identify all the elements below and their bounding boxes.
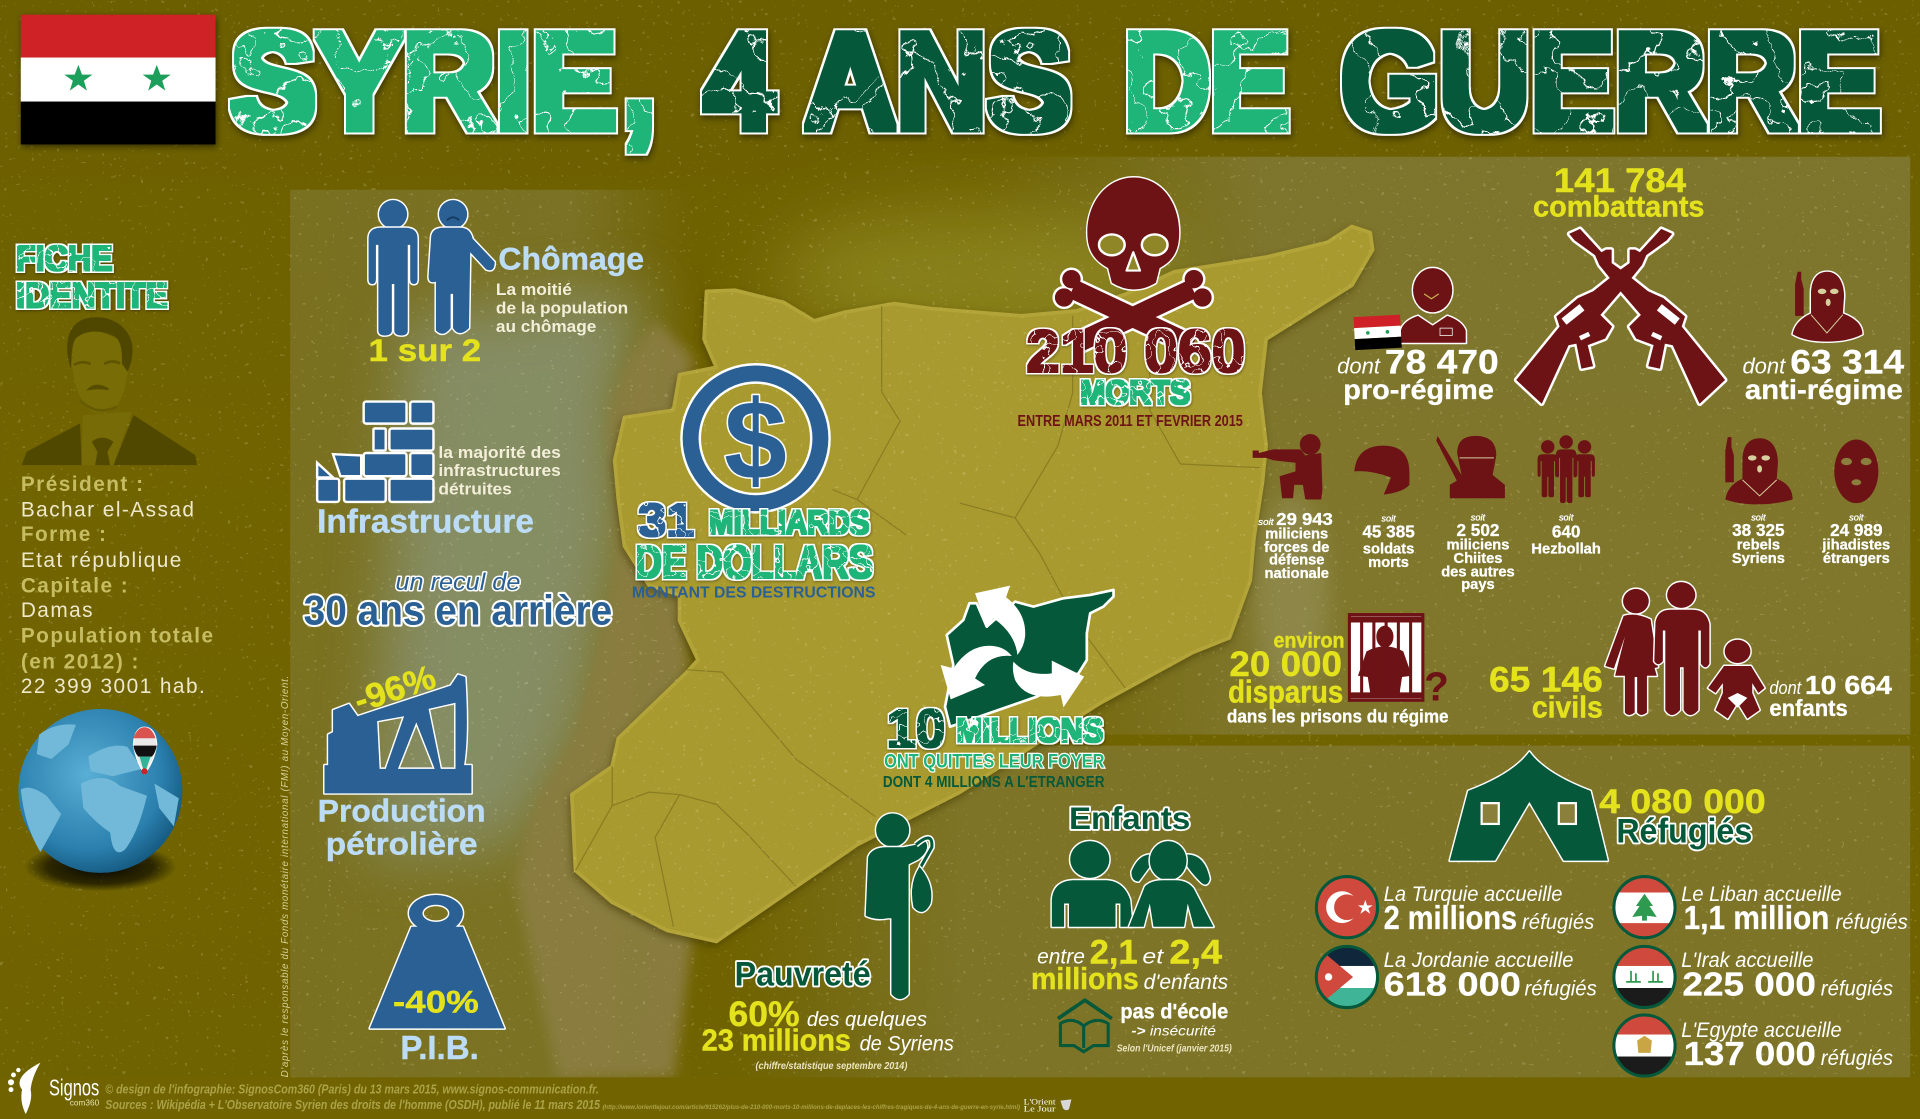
icon: crossed rifles: [1517, 229, 1725, 403]
neighbouring land west of the map: [514, 321, 692, 1077]
stat: 65 146: [1489, 660, 1603, 700]
footer credits: (http://www.lorientlejour.com/article/915262/plus-de-210-000-morts-10-millions-de-deplaces-les-chiffres-tragiques-de-4-ans-de-guerre-en-syrie.html): [602, 1104, 1020, 1111]
label: 24 989: [1830, 520, 1883, 540]
logo: Signos com360: com360: [70, 1098, 99, 1108]
block: 30 ans en arrière: un recul de: [396, 569, 520, 596]
caption: MONTANT DES DESTRUCTIONS: [632, 584, 876, 601]
footer credits: [105, 1081, 1020, 1112]
footer credits: Sources : Wikipédia + L'Observatoire Syrien des droits de l'homme (OSDH), publié le 11 mars 2015: [105, 1097, 601, 1112]
icon: boy and girl: [1052, 841, 1213, 927]
icon: tent: [1450, 752, 1608, 861]
block: 65 146 civils: enfants: [1769, 695, 1848, 721]
text block: identity facts: Population totale: [21, 625, 215, 648]
block: 65 146 civils: civils: [1532, 690, 1603, 724]
label: 38 325: [1732, 520, 1785, 540]
block: 210 060 morts: [1018, 178, 1245, 430]
question mark: ?: [1424, 663, 1449, 709]
block: production pétrolière: [318, 658, 486, 862]
label: miliciens: [1447, 538, 1509, 554]
block: pauvreté: (chiffre/statistique septembre 2014): [756, 1061, 907, 1072]
label: [1821, 512, 1890, 567]
icon: flag of Turkey: [1316, 877, 1378, 938]
icon: flag of Iraq: [1613, 945, 1676, 1009]
host country: Egypte: 137 000: [1684, 1036, 1816, 1073]
description: La moitié: [496, 280, 572, 299]
block: 20 000 disparus: [1227, 615, 1449, 726]
block: 20 000 disparus: 20 000: [1229, 644, 1342, 684]
block: 10 millions déplacés: [883, 586, 1114, 791]
panel: refugees (right bottom): [735, 746, 1910, 1077]
host country: Jordanie: réfugiés: [1524, 977, 1597, 1000]
host country: Irak: [1613, 945, 1893, 1009]
icon: dollar coin: $: [724, 377, 787, 503]
panel: fighters and civilians (right top): [980, 157, 1910, 735]
label: soit: [1559, 512, 1574, 522]
label: [1362, 514, 1415, 571]
icon: flag of Jordan: [1315, 945, 1379, 1009]
label: pays: [1461, 577, 1495, 593]
label: Hezbollah: [1531, 541, 1601, 557]
host country: Turquie: 2 millions: [1384, 900, 1517, 937]
icon: officer with flag: [1354, 268, 1466, 350]
title: [230, 0, 1881, 159]
icon: oil pump: [324, 675, 471, 793]
stat: 210 060: [1026, 318, 1245, 385]
block: enfants: 2,4: [1169, 934, 1222, 972]
label: Syriens: [1732, 551, 1785, 567]
block: enfants: Selon l'Unicef (janvier 2015): [1117, 1044, 1232, 1055]
description: infrastructures: [438, 461, 561, 480]
icon: group of three: [1538, 435, 1595, 503]
icon: prisoner behind bars: [1349, 615, 1423, 700]
block: 210 060 morts: MORTS: [1080, 374, 1190, 412]
panel: economy (left): [290, 190, 694, 1077]
block: pauvreté: de Syriens: [860, 1032, 954, 1055]
glow above the map: [771, 208, 1188, 343]
block: enfants: et: [1142, 946, 1165, 969]
block: anti-régime: 63 314: [1790, 343, 1904, 381]
text block: identity facts: (en 2012) :: [21, 650, 140, 673]
label: [1531, 512, 1601, 557]
text block: identity facts: Bachar el-Assad: [21, 499, 195, 522]
label: soldats: [1363, 541, 1414, 557]
label: 640: [1552, 521, 1580, 541]
block: pro-régime: pro-régime: [1343, 374, 1494, 405]
text block: identity facts: Etat république: [21, 549, 183, 572]
block: 10 millions déplacés: DONT 4 MILLIONS A L'ETRANGER: [883, 774, 1104, 791]
heading: fiche identité: FICHE: [16, 239, 113, 279]
title: GUERRE: [1341, 6, 1881, 159]
heading: Pauvreté: [735, 956, 871, 994]
fighter breakdown: jihadistes étrangers: [1821, 440, 1890, 567]
icon: family: [1605, 582, 1764, 719]
sea area behind the map: [367, 288, 649, 857]
block: pauvreté: [702, 814, 954, 1072]
block: 31 milliards: DE DOLLARS: [636, 536, 873, 588]
label: soit 29 943: [1258, 509, 1333, 529]
label: 45 385: [1362, 521, 1415, 541]
block: anti-régime: [1742, 272, 1904, 405]
fighter breakdown: rebels syriens: [1725, 437, 1793, 567]
stat: 4 080 000: [1599, 783, 1766, 821]
icon: school book: [1058, 1000, 1112, 1052]
text block: identity facts: [21, 473, 215, 698]
text: La Turquie accueille: [1384, 883, 1562, 906]
stat: 141 784: [1554, 162, 1686, 200]
text: Le Liban accueille: [1681, 883, 1842, 906]
vertical source note: D'après le responsable du Fonds monétaire international (FMI) au Moyen-Orient.: [280, 675, 291, 1077]
text: L'Egypte accueille: [1681, 1019, 1842, 1042]
label: P.I.B.: [400, 1030, 479, 1067]
text block: identity facts: 22 399 3001 hab.: [21, 675, 206, 698]
heading: Chômage: [498, 240, 644, 276]
label: soit: [1751, 512, 1766, 522]
fighter breakdown: miliciens forces de défense: [1253, 434, 1333, 582]
icon: person with bundle: [866, 814, 932, 999]
block: réfugiés: Réfugiés: [1616, 812, 1752, 850]
portrait: Bachar el-Assad: [22, 317, 197, 465]
label: 2 502: [1457, 520, 1499, 540]
block: 20 000 disparus: disparus: [1228, 674, 1343, 710]
icon: skull and crossbones: [1052, 178, 1214, 345]
map of Syria: [572, 226, 1373, 941]
text block: identity facts: Damas: [21, 599, 94, 622]
children count: dont: [1769, 677, 1802, 698]
L'Orient Le Jour credit: [1024, 1097, 1071, 1114]
label: Chiites: [1453, 551, 1502, 567]
host country: Liban: [1613, 875, 1908, 939]
block: 30 ans en arrière: 30 ans en arrière: [304, 586, 612, 633]
fighter breakdown: soldats morts: [1354, 446, 1415, 571]
title: 4 ANS: [704, 6, 1071, 159]
caption: ENTRE MARS 2011 ET FEVRIER 2015: [1018, 413, 1243, 430]
text block: identity facts: Président :: [21, 473, 144, 496]
amount: 31: [638, 494, 694, 546]
label: [1258, 509, 1333, 582]
icon: balaclava: [1834, 440, 1878, 503]
block: pauvreté: des quelques: [807, 1009, 927, 1031]
block: production pétrolière: pétrolière: [326, 826, 478, 862]
host country: Liban: 1,1 million: [1684, 900, 1829, 937]
icon: hooded fighter: [1793, 272, 1862, 342]
glow east of the map: [1255, 496, 1329, 704]
block: 30 ans en arrière: [304, 569, 612, 633]
label: jihadistes: [1821, 538, 1890, 554]
icon: helmet: [1354, 446, 1409, 495]
host country: Egypte: [1613, 1014, 1893, 1077]
stat: 10: [887, 699, 945, 759]
label: nationale: [1264, 566, 1329, 582]
label: soit: [1381, 514, 1396, 524]
icon: weight: [370, 895, 504, 1028]
logo: Signos com360: [8, 1063, 99, 1114]
host country: Irak: réfugiés: [1821, 977, 1893, 1000]
block: anti-régime: anti-régime: [1745, 374, 1903, 405]
description: [496, 280, 628, 336]
stat: 60%: [729, 994, 800, 1034]
icon: green map with arrows: [941, 586, 1114, 727]
label: [1441, 512, 1515, 593]
description: détruites: [438, 480, 512, 499]
description: au chômage: [496, 317, 596, 336]
block: enfants: d'enfants: [1144, 971, 1228, 994]
host country: Irak: 225 000: [1682, 966, 1816, 1003]
description: la majorité des: [438, 443, 561, 462]
icon: globe with Syria pin: [18, 709, 182, 891]
host country: Liban: réfugiés: [1836, 911, 1908, 934]
text: L'Irak accueille: [1681, 949, 1813, 972]
host country: Jordanie: [1315, 945, 1597, 1009]
block: combattants: [1517, 162, 1725, 403]
text: La Jordanie accueille: [1384, 949, 1573, 972]
block: réfugiés: [1450, 752, 1766, 861]
block: enfants: millions: [1031, 962, 1139, 996]
label: soit: [1849, 512, 1864, 522]
L'Orient Le Jour credit: Le Jour: [1024, 1105, 1056, 1114]
caption: ONT QUITTES LEUR FOYER: [884, 752, 1105, 773]
icon: dollar coin: [691, 373, 820, 503]
icon: flag of Lebanon: [1613, 875, 1676, 939]
note: pas d'école: [1120, 1001, 1228, 1024]
description: de la population: [496, 298, 628, 317]
block: enfants: [1031, 800, 1232, 1055]
stat: -96%: [350, 658, 440, 720]
heading: fiche identité: [16, 239, 168, 315]
stat: dont: [1337, 353, 1381, 378]
heading: Enfants: [1069, 800, 1190, 836]
footer credits: © design de l'infographie: SignosCom360 (Paris) du 13 mars 2015, www.signos-communication.fr.: [105, 1081, 599, 1096]
block: 65 146 civils: 10 664: [1805, 672, 1893, 700]
block: pauvreté: 23 millions: [702, 1023, 851, 1057]
block: 31 milliards: [632, 373, 876, 601]
icon: hooded rebel: [1725, 437, 1793, 504]
footer band: [0, 1077, 1920, 1119]
text block: identity facts: Forme :: [21, 523, 107, 546]
block: 20 000 disparus: dans les prisons du régime: [1227, 705, 1449, 726]
stat: environ: [1273, 630, 1344, 653]
icon: militiaman with rifle: [1436, 436, 1505, 498]
label: des autres: [1441, 565, 1515, 581]
fighter breakdown: miliciens chiites: [1436, 436, 1515, 593]
Syrian flag: [21, 15, 216, 144]
label: soit: [1471, 512, 1486, 522]
stat: entre: [1037, 946, 1085, 969]
host country: Jordanie: 618 000: [1384, 966, 1521, 1003]
heading: Infrastructure: [317, 504, 534, 541]
label: défense: [1269, 552, 1324, 568]
icon: two people: [369, 200, 495, 335]
host country: Turquie: [1316, 877, 1594, 938]
host country: Egypte: réfugiés: [1821, 1047, 1893, 1070]
icon: flag of Egypt: [1613, 1014, 1676, 1077]
stat: -40%: [393, 983, 479, 1019]
block: chômage: [369, 200, 644, 368]
icon: kneeling sniper: [1253, 434, 1322, 500]
label: Production: [318, 793, 486, 828]
stat: dont: [1742, 353, 1786, 378]
host country: Turquie: réfugiés: [1522, 911, 1594, 934]
block: enfants: 2,1: [1090, 934, 1138, 972]
L'Orient Le Jour credit: L'Orient: [1024, 1097, 1056, 1106]
stat: 1 sur 2: [369, 332, 481, 368]
label: rebels: [1737, 538, 1780, 554]
text block: identity facts: Capitale :: [21, 575, 129, 598]
block: 65 146 civils: [1489, 582, 1893, 724]
icon: broken wall: [317, 402, 433, 502]
logo: Signos com360: Signos: [49, 1075, 99, 1101]
title: DE: [1124, 6, 1289, 159]
block: PIB: [370, 895, 504, 1067]
block: combattants: combattants: [1533, 191, 1704, 224]
label: miliciens: [1265, 527, 1328, 543]
block: pro-régime: 78 470: [1385, 343, 1499, 381]
description: [438, 443, 561, 499]
block: enfants: -> insécurité: [1131, 1023, 1216, 1039]
heading: fiche identité: IDENTITE: [16, 275, 168, 315]
fighter breakdown: Hezbollah: [1531, 435, 1601, 557]
label: [1732, 512, 1785, 567]
block: infrastructure: [317, 402, 561, 541]
label: morts: [1368, 555, 1409, 571]
block: pro-régime: [1337, 268, 1499, 405]
block: 31 milliards: MILLIARDS: [709, 504, 869, 542]
label: étrangers: [1823, 551, 1890, 567]
block: 10 millions déplacés: MILLIONS: [956, 712, 1103, 750]
title: SYRIE: [230, 6, 617, 159]
label: forces de: [1264, 540, 1329, 556]
